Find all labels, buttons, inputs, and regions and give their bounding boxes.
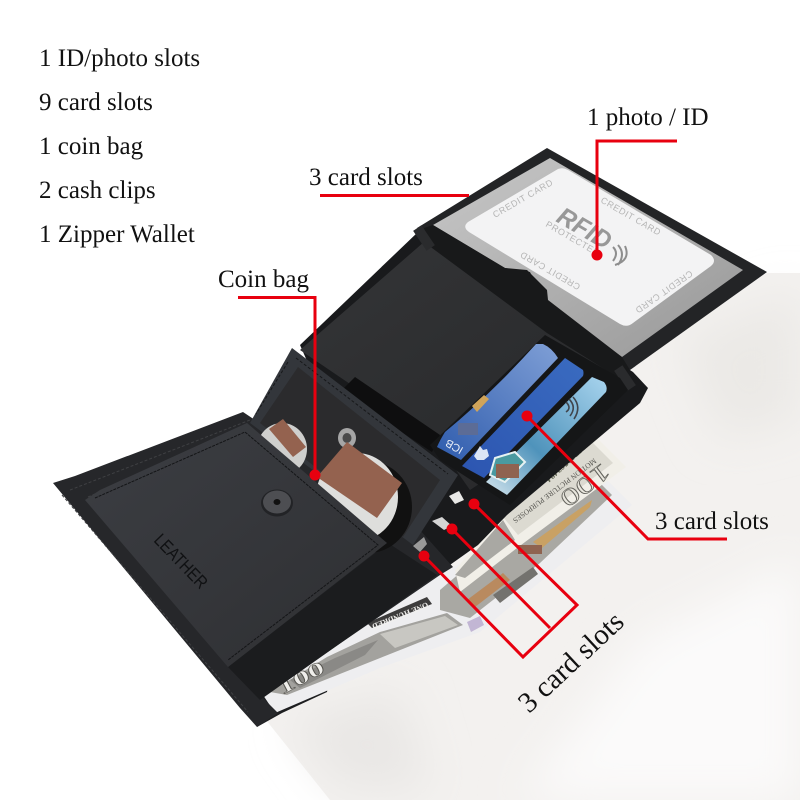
feature list [39,45,200,248]
card two logo [474,446,489,460]
top flap: CREDIT CARD [518,249,582,292]
flap leather edge [417,148,767,370]
item: 1 ID/photo slots [39,45,200,72]
main inner panel [300,225,636,490]
RFID label: RFID [552,202,617,255]
item: 9 card slots [39,89,153,116]
strip end tab left [413,225,435,251]
contactless arcs [566,397,578,419]
chip [472,395,489,412]
bill denomination: 100 [274,657,328,699]
strip end tab right [614,365,636,391]
banner stripe [367,597,432,628]
RFID card [465,168,714,326]
brown patch [496,464,519,478]
card slots [430,335,628,505]
coins [257,419,412,553]
LEATHER stamp: LEATHER [150,530,212,593]
slot bed [430,335,628,505]
label: 1 photo / ID [587,104,709,131]
bill fine print: MOTION PICTURE PURPOSES [511,456,598,525]
coin flap [250,348,458,545]
top bill [455,428,626,592]
blue patch [458,423,478,435]
signal arcs [613,245,627,265]
gold engraving [533,500,592,548]
item: 1 coin bag [39,133,144,160]
snap button [261,490,293,516]
lilac security band [467,616,484,632]
coin left [257,423,307,475]
table surface [262,273,800,800]
label: 3 card slots [309,164,423,191]
brown patch left [269,419,306,457]
brown patch right [317,442,402,518]
portrait highlight [380,616,458,648]
RFID label: PROTECTED [544,219,602,258]
swirl [455,520,515,578]
left base panel [53,412,453,727]
blue card one [437,344,558,460]
blue card two [462,358,584,478]
printed card labels: CREDIT CARD [491,177,555,220]
callout: bracket 3 card slots [418,498,630,719]
item: 1 Zipper Wallet [39,221,195,248]
bottom bill grey portrait [270,613,463,695]
portrait shadow [290,640,378,688]
wallet lower lip [257,675,330,727]
shadow behind right coin [324,461,412,553]
small metal hardware [413,491,464,552]
callout: coin bag [218,266,320,480]
label: Coin bag [218,266,309,293]
orange engraving [467,573,510,607]
front coin pocket [85,423,387,667]
pale blue card three [486,377,607,495]
RFID label [544,202,627,265]
top flap: CREDIT CARD [633,268,695,316]
dark engraving [493,567,538,603]
fabric strip [424,225,630,377]
white edge of notes [263,480,632,713]
label: 3 card slots [655,508,769,535]
teal logo [490,452,525,482]
top flap [417,148,767,370]
item: 2 cash clips [39,177,156,204]
ICB mark: ICB [444,436,466,456]
frosted window [433,158,743,357]
snap socket [338,428,356,448]
serial number: MB91563484 [543,443,587,485]
slot [340,377,440,452]
brown redaction on bill [518,545,542,554]
wallet body right [300,232,648,572]
upper grey engraving band [440,478,612,618]
rotated label: 3 card slots [512,606,630,719]
bill large numeral: 100 [555,457,615,512]
callout: right 3 card slots [522,410,769,539]
coin right [316,453,398,541]
top flap: CREDIT CARD [599,195,663,238]
cash stack [263,478,632,713]
callout: 1 photo / ID [587,104,709,260]
bill banner text: ONE HUNDRED [371,600,430,631]
